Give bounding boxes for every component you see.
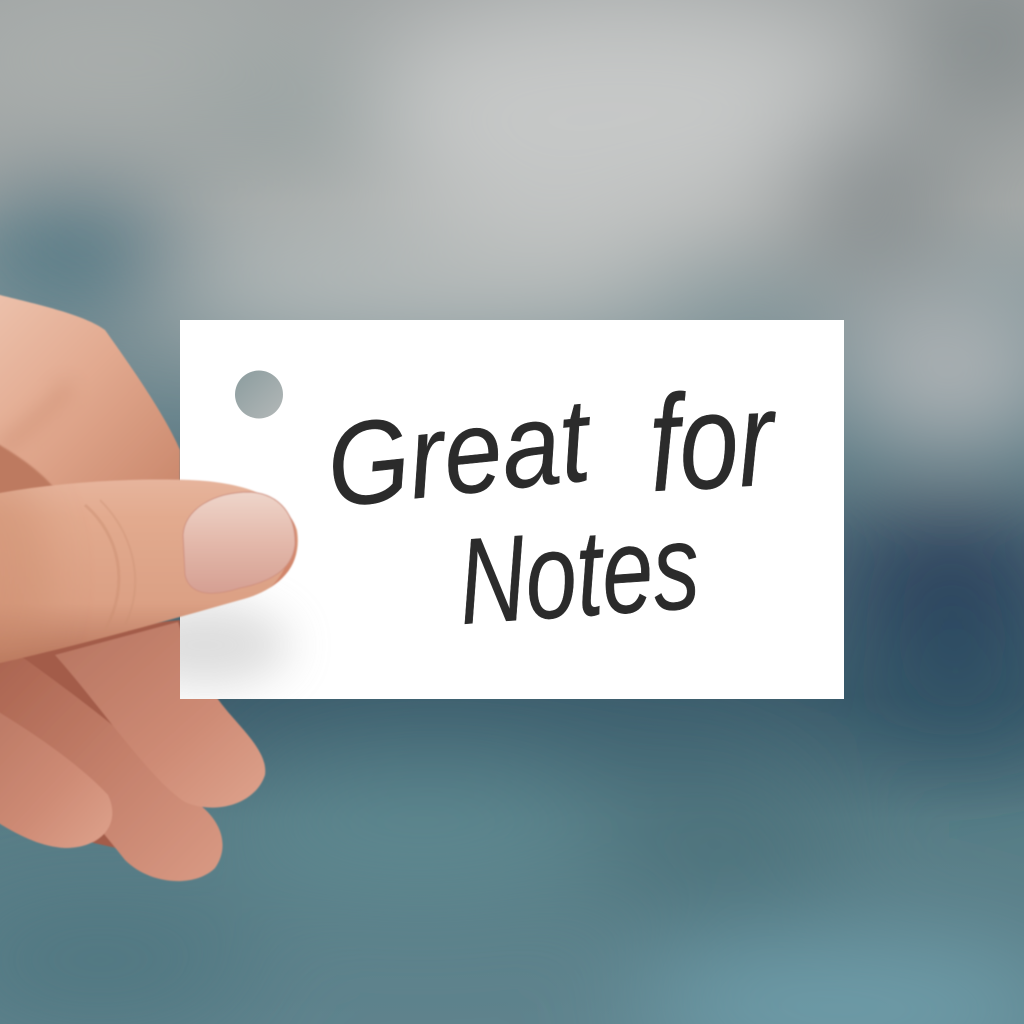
hand: thumb in front of card bbox=[0, 478, 299, 663]
punched hole bbox=[235, 370, 283, 418]
thumb shadow on the card bbox=[180, 598, 296, 699]
index finger behind the card bbox=[0, 290, 180, 510]
handwritten word: Great: Great bbox=[321, 374, 599, 533]
middle finger bbox=[55, 622, 265, 808]
handwritten word: Notes: Notes bbox=[454, 498, 703, 650]
white card bbox=[120, 320, 844, 699]
ring finger bbox=[0, 620, 223, 881]
little finger bbox=[0, 695, 112, 848]
handwritten word: for: for bbox=[646, 361, 781, 520]
thumbnail bbox=[183, 492, 295, 593]
palm base bbox=[0, 620, 200, 850]
hand: lower fingers behind the card bbox=[0, 620, 265, 881]
